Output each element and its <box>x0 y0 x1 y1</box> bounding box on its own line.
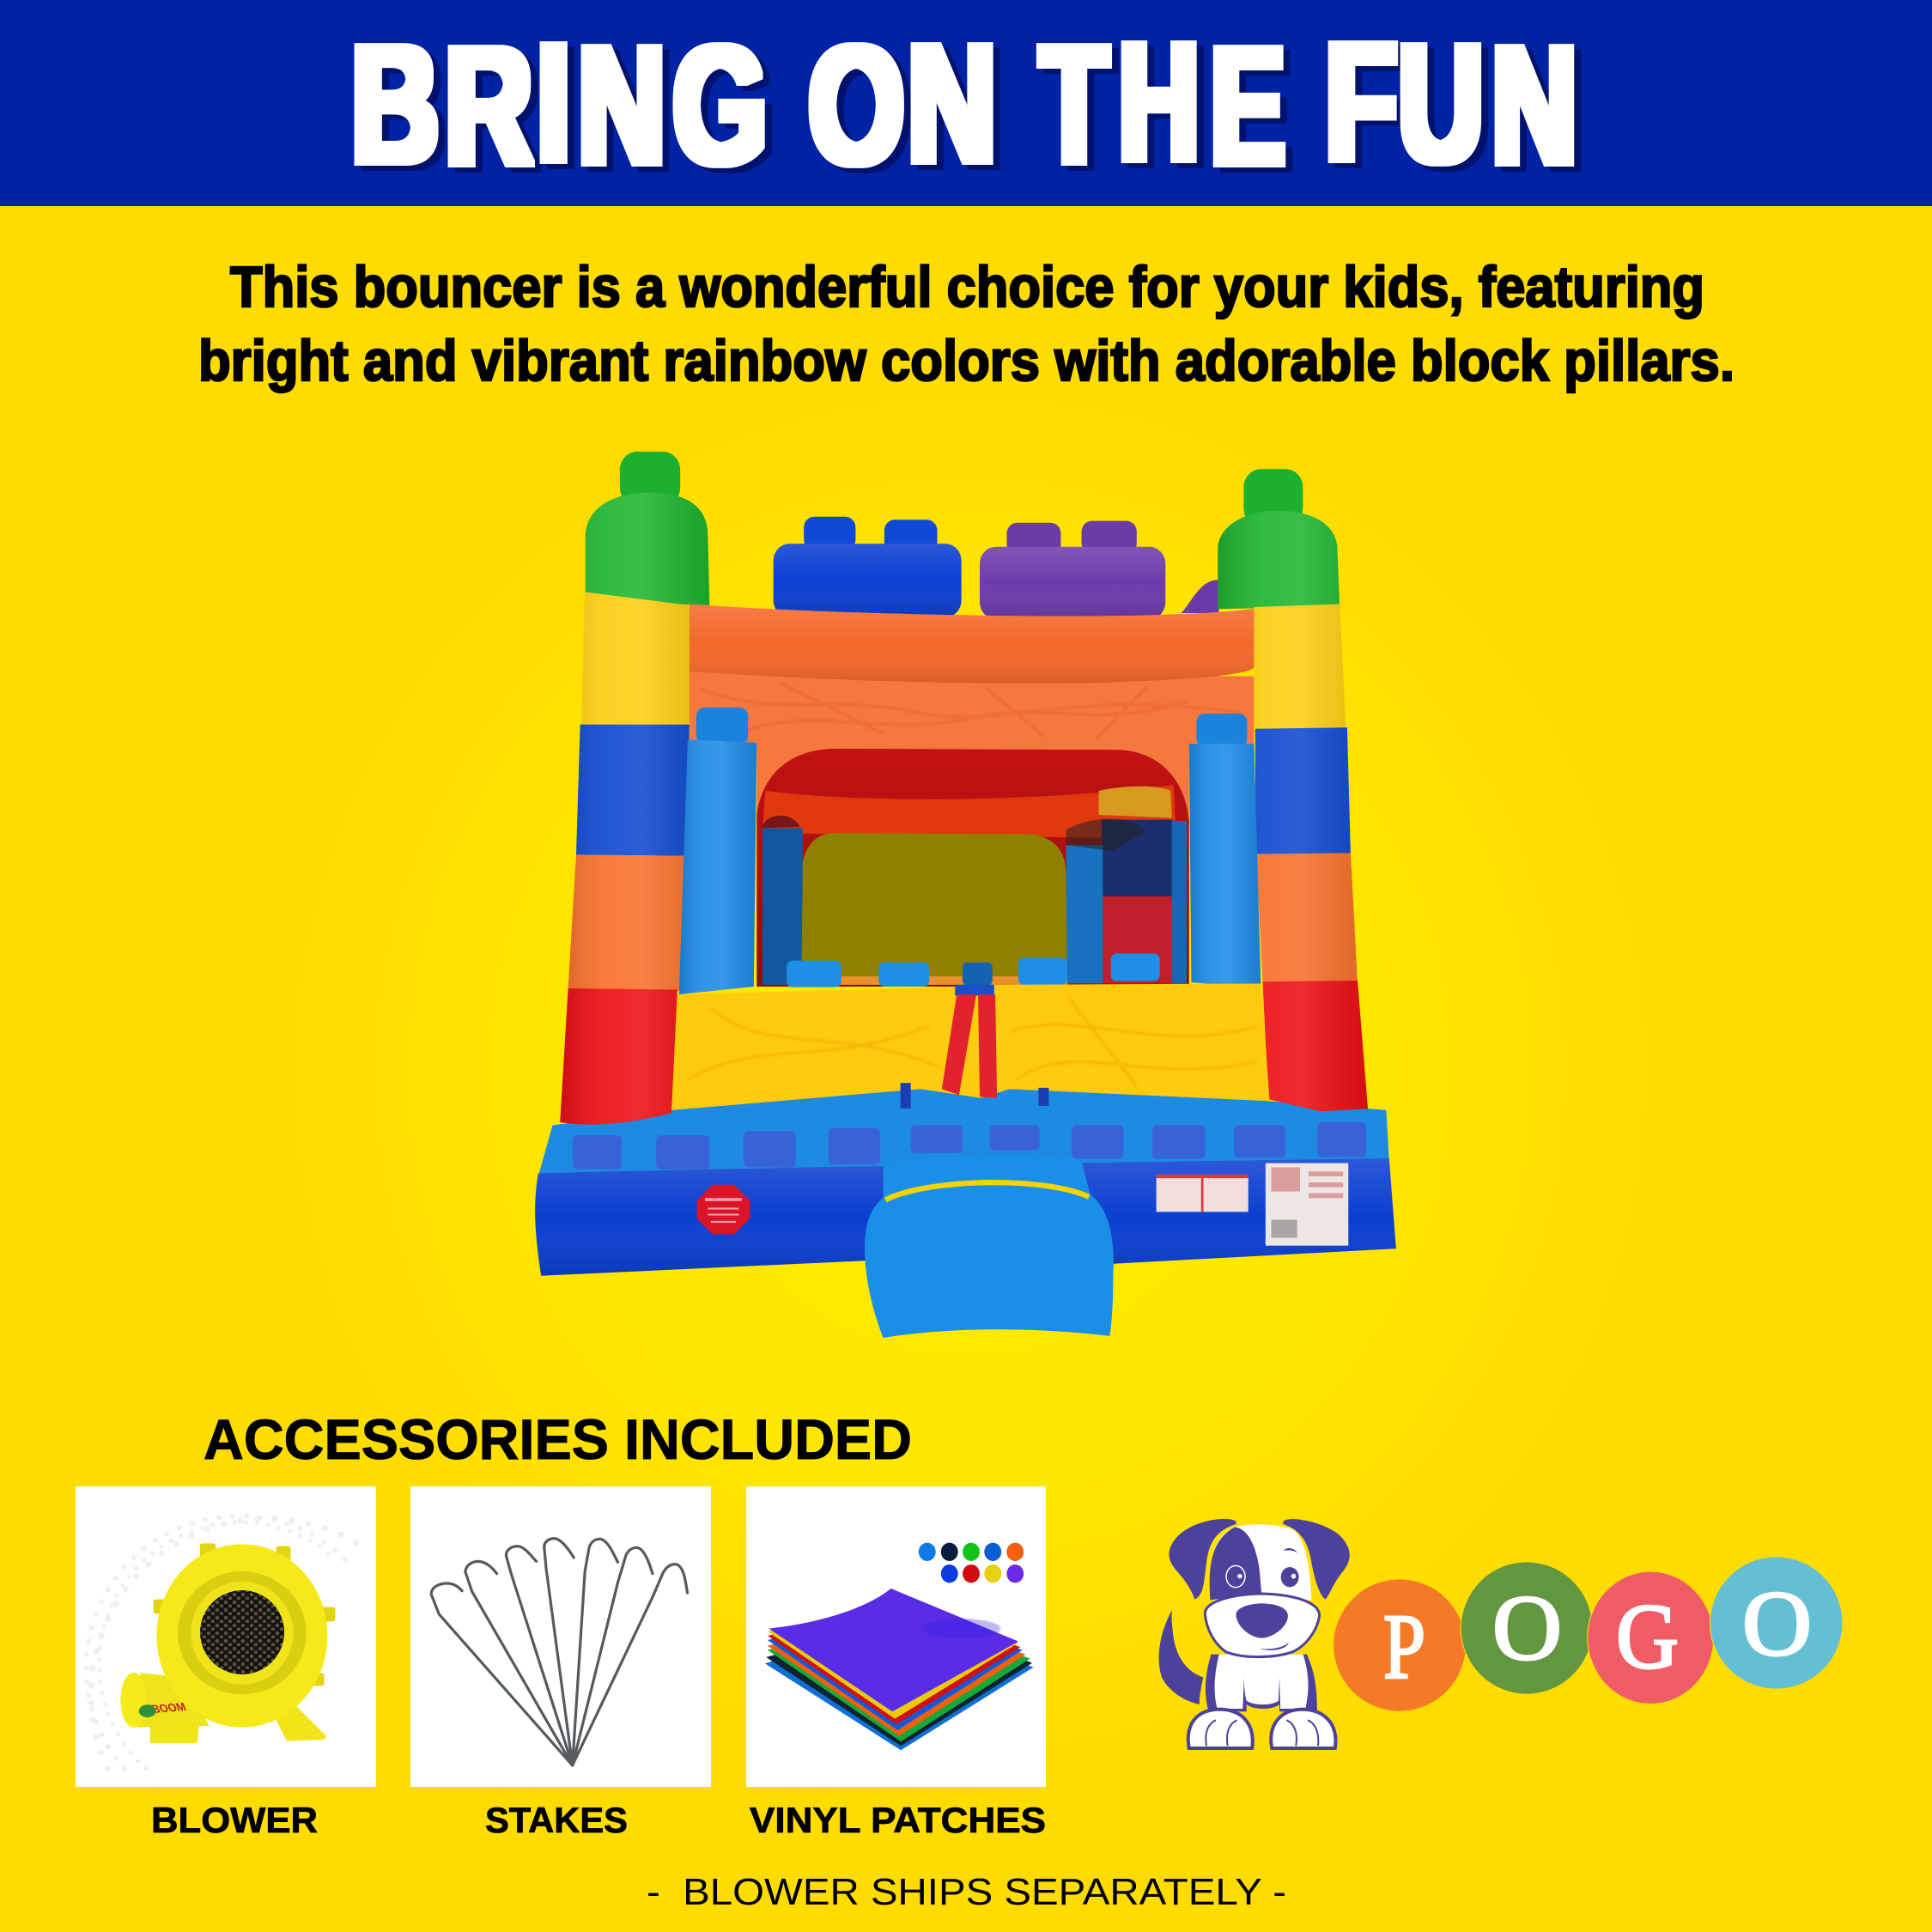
warning octagon <box>697 1185 750 1234</box>
safety labels <box>1157 1163 1348 1246</box>
dog mascot <box>1159 1519 1350 1748</box>
intro text: This bouncer is a wonderful choice for your kids, featuring <box>230 255 1704 319</box>
letters <box>1383 1573 1812 1698</box>
blower machine <box>120 1543 335 1743</box>
orange roof beam <box>690 604 1254 683</box>
letters: O <box>1742 1573 1812 1675</box>
vinyl sheet stack <box>765 1589 1034 1750</box>
right tower <box>1218 469 1368 1111</box>
title: THE <box>1040 9 1285 200</box>
blower intake grille <box>200 1590 284 1674</box>
letters: P <box>1383 1596 1425 1698</box>
letters: G <box>1616 1586 1679 1688</box>
entry ramp <box>865 1156 1114 1338</box>
purple roof block <box>980 521 1165 619</box>
label: stakes: STAKES <box>485 1800 628 1840</box>
panel: vinyl patches <box>746 1486 1046 1787</box>
panel: blower <box>76 1486 376 1787</box>
stake set <box>431 1539 688 1765</box>
intro text <box>198 255 1735 393</box>
colour dots <box>919 1543 1024 1583</box>
base front wall <box>535 1158 1396 1276</box>
title: FUN <box>1325 8 1577 199</box>
blower machine: BOOM <box>149 1701 188 1716</box>
letters: O <box>1492 1577 1562 1680</box>
yellow front panel <box>671 983 1270 1110</box>
POGO logo <box>1159 1519 1843 1748</box>
left blue column <box>679 708 756 994</box>
heading: accessories included: ACCESSORIES INCLUDED <box>204 1407 912 1471</box>
halftone arcs <box>86 1516 361 1769</box>
bounce house illustration <box>535 452 1396 1338</box>
label: blower: BLOWER <box>151 1800 318 1840</box>
intro text: bright and vibrant rainbow colors with adorable block pillars. <box>198 329 1735 393</box>
orange roof wall <box>690 671 1254 821</box>
entry opening interior <box>756 749 1189 987</box>
base platform <box>538 1089 1389 1176</box>
label: vinyl patches: VINYL PATCHES <box>750 1800 1046 1840</box>
blue roof block <box>774 517 962 617</box>
red door straps <box>901 985 1048 1109</box>
purple block behind right <box>1181 580 1219 613</box>
header banner <box>0 0 1932 206</box>
letter discs <box>1334 1557 1843 1711</box>
window view <box>801 833 1067 977</box>
title <box>351 8 1577 200</box>
right blue column <box>1189 714 1261 988</box>
panel: stakes <box>410 1486 711 1787</box>
shipping note: - BLOWER SHIPS SEPARATELY - <box>647 1871 1286 1913</box>
title: BRING <box>351 9 767 200</box>
title: ON <box>809 10 996 199</box>
left tower <box>560 452 709 1125</box>
